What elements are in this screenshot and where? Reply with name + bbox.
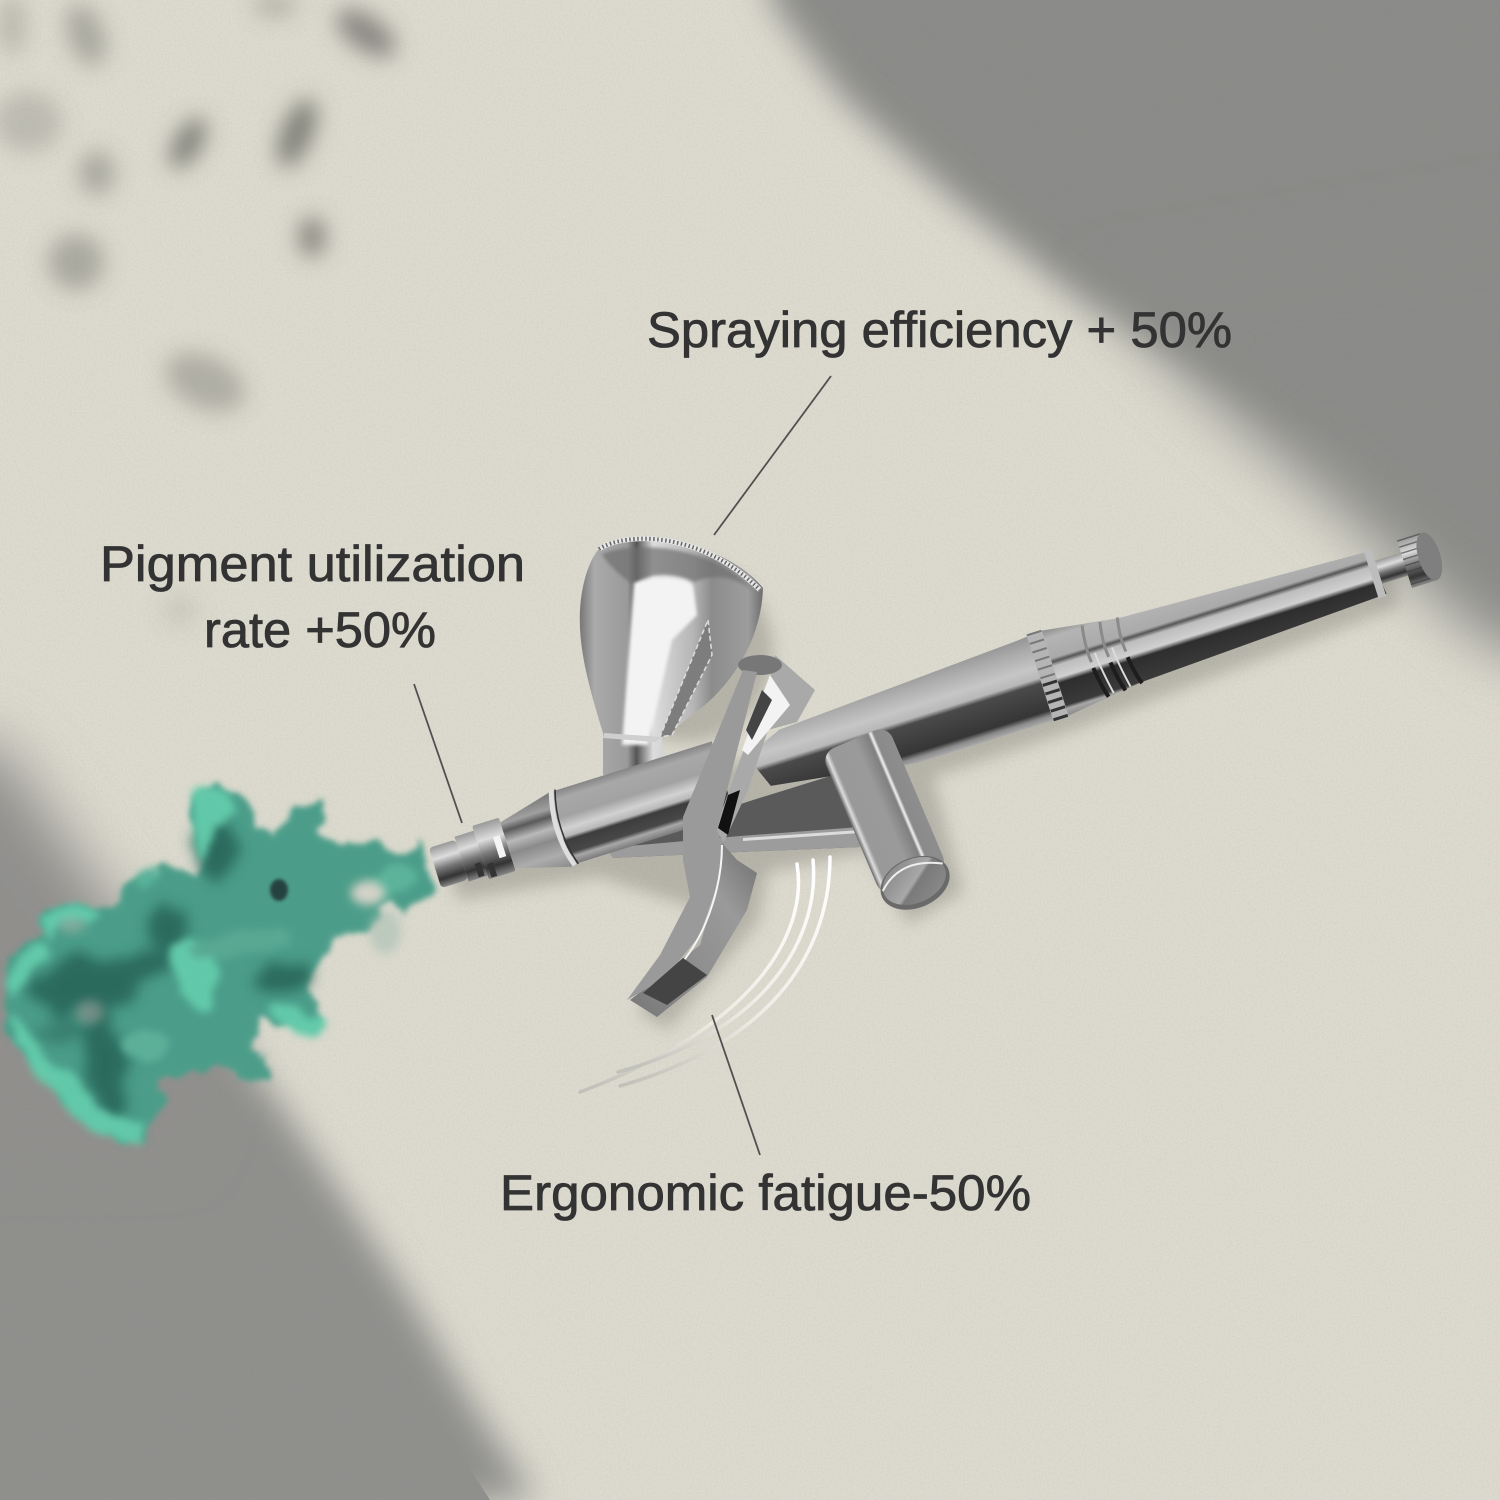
label: spraying efficiency: Spraying efficiency + 50%: [647, 302, 1232, 358]
rear tube middle: [737, 631, 1068, 811]
nozzle cone: [496, 792, 573, 883]
trigger mechanism: [715, 655, 815, 842]
leader line: cup: [714, 376, 831, 535]
shadow: blurred leaves: [0, 0, 404, 626]
cup upper shade: [602, 547, 755, 592]
label: ergonomic fatigue: Ergonomic fatigue-50%: [500, 1165, 1031, 1221]
shadow: lower left interior: [0, 1000, 490, 1500]
front barrel: [548, 741, 735, 865]
leader line: trigger: [712, 1015, 760, 1155]
label: pigment utilization: Pigment utilization: [100, 536, 525, 592]
cloud dark folds: [27, 818, 315, 1123]
trigger: [627, 655, 815, 1017]
shadow: lower left soft start: [0, 735, 215, 1150]
cup highlight: [622, 577, 697, 745]
nozzle tip: [429, 840, 468, 888]
cup body: [580, 540, 763, 775]
cloud body: [4, 785, 439, 1143]
nozzle collar: [472, 818, 516, 879]
cup rim: [599, 539, 760, 590]
nozzle ring: [455, 831, 488, 882]
paint cup: [580, 539, 763, 775]
shadow: upper right window shade: [770, 0, 1500, 420]
cloud holes: [351, 881, 385, 905]
cup engraving: [660, 620, 712, 737]
label: rate: rate +50%: [204, 602, 436, 658]
leader line: nozzle: [414, 684, 462, 823]
airbrush barrel: [421, 509, 1454, 912]
rear tube: [1042, 529, 1393, 716]
handle wedge: [607, 773, 860, 858]
trigger edge highlight: [680, 845, 722, 965]
cup neck ring: [603, 733, 662, 742]
motion arcs: [580, 857, 830, 1092]
shadow: lower left window shade: [0, 940, 535, 1500]
rear knurled collar: [1026, 630, 1069, 722]
trigger front face: [627, 670, 757, 1000]
rear ring: [1364, 548, 1386, 598]
needle cap knob: [1397, 529, 1447, 588]
trigger tip: [643, 958, 707, 1005]
cloud light folds: [6, 790, 423, 1140]
needle cap rod: [1375, 552, 1411, 584]
finger rest: [821, 725, 958, 920]
spray paint cloud: [4, 785, 439, 1143]
airbrush shadow: [448, 562, 1398, 1030]
rear ribs: [1080, 613, 1143, 699]
shadow: upper right soft end: [1100, 200, 1500, 680]
trigger side face: [630, 843, 757, 1017]
